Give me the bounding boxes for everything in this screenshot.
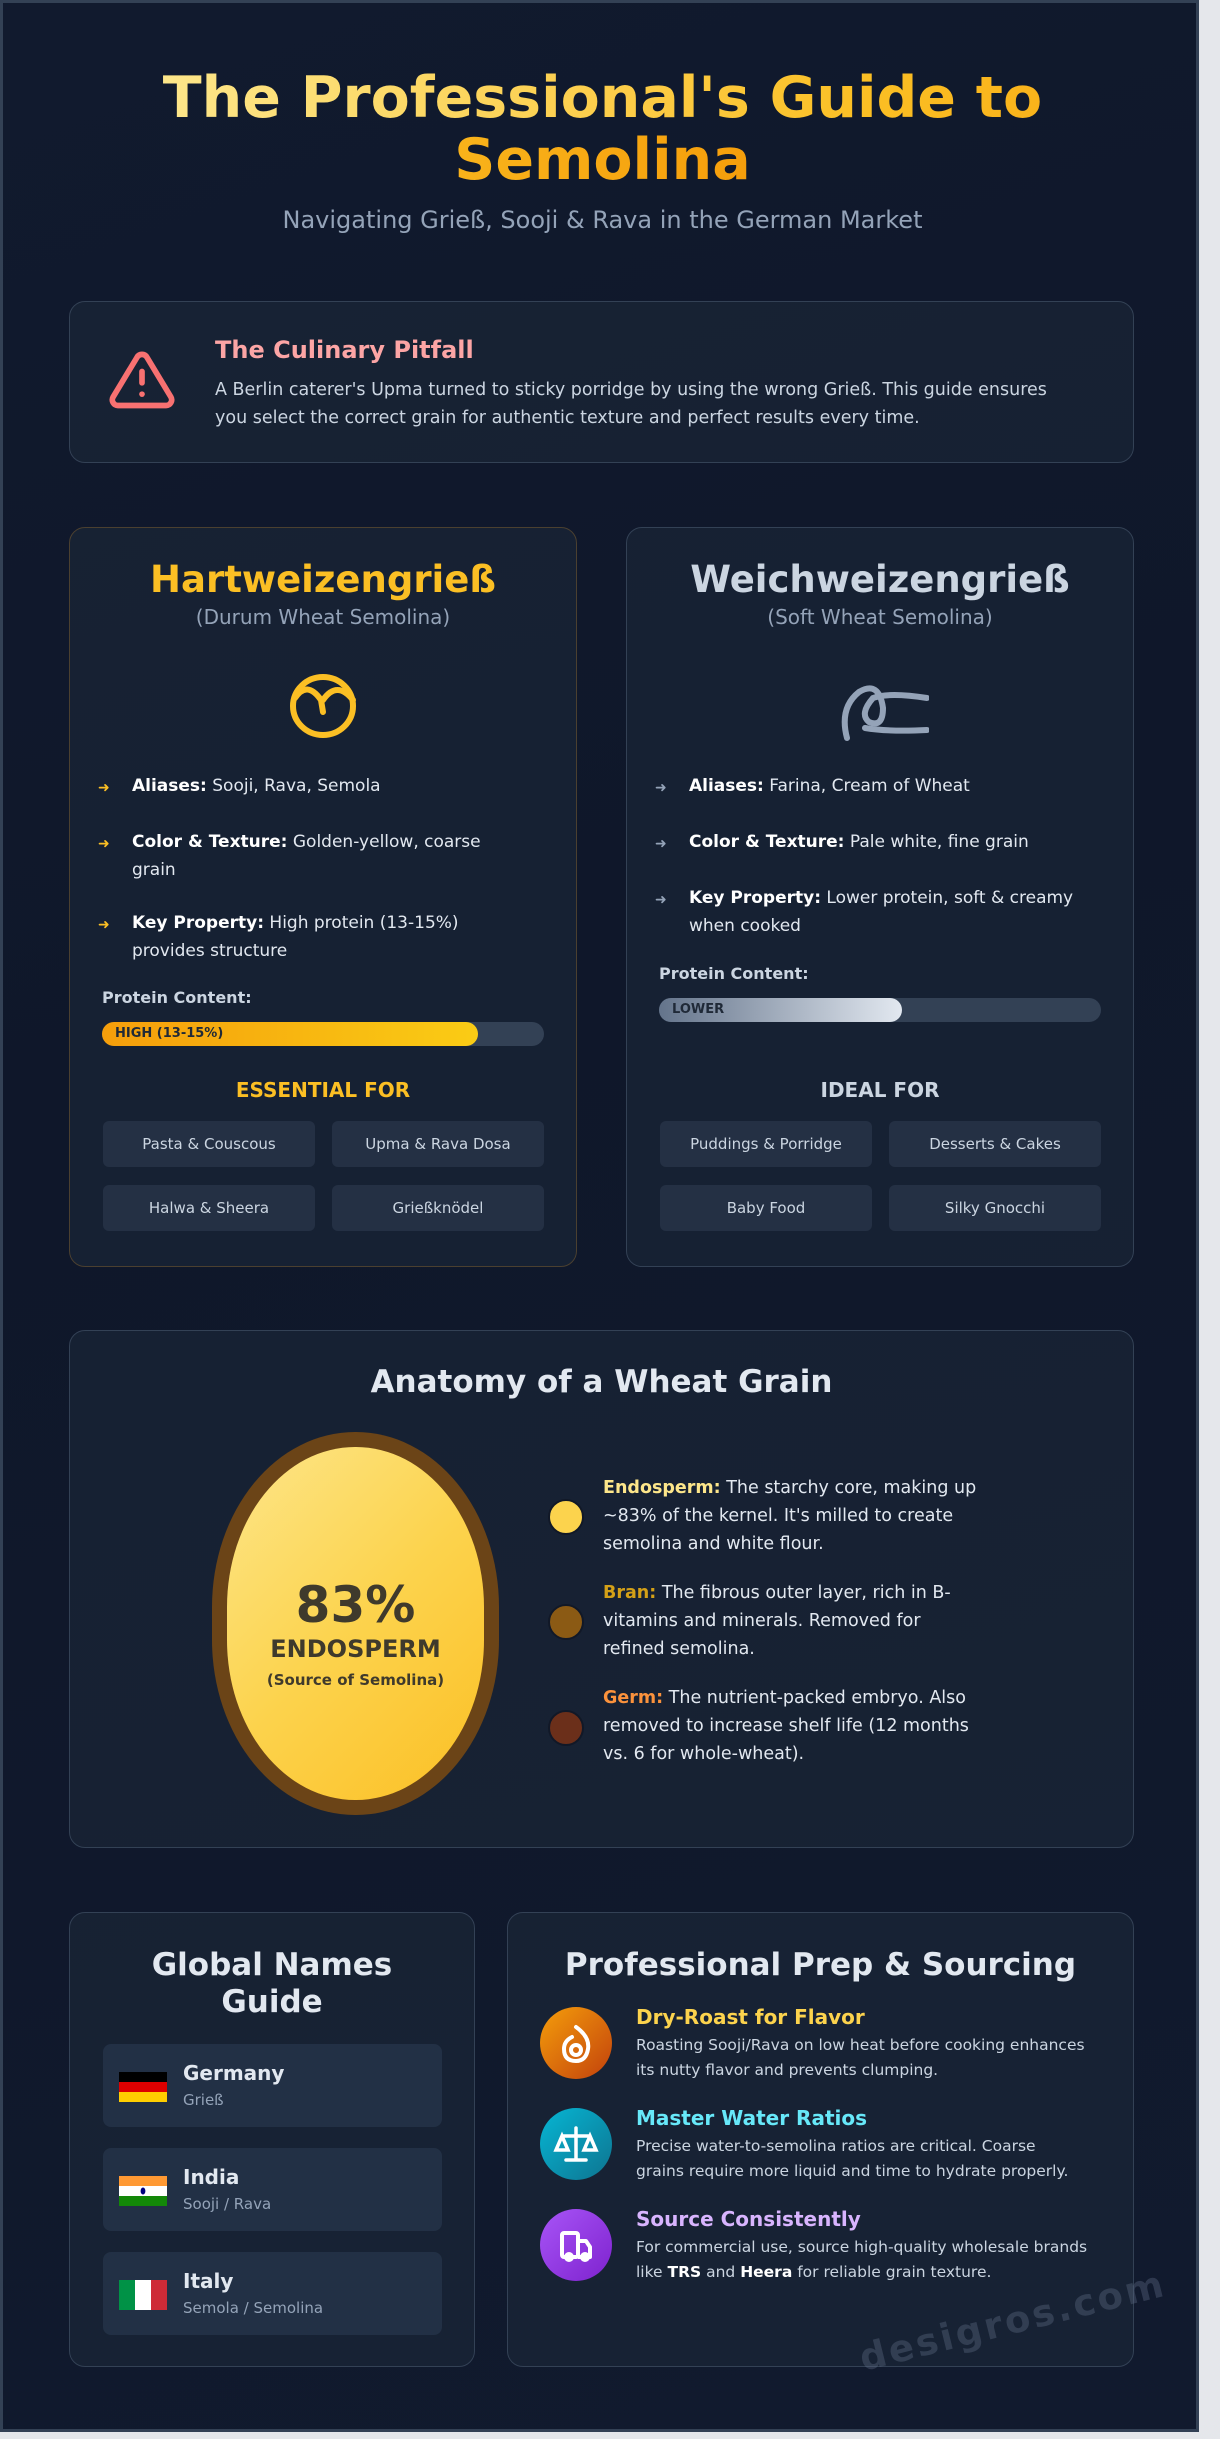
icon: swirl [842, 685, 929, 741]
panel: Hartweizengrieß: Grießknödel [393, 1199, 483, 1217]
essential for heading: ESSENTIAL FOR [236, 1078, 410, 1102]
country: india [103, 2148, 442, 2231]
panel: Weichweizengrieß: Baby Food [727, 1199, 805, 1217]
legend: bran [548, 1604, 584, 1640]
panel: Hartweizengrieß: ➜ [98, 917, 110, 933]
panel: Weichweizengrieß: Silky Gnocchi [945, 1199, 1045, 1217]
pitfall text: A Berlin caterer's Upma turned to sticky porridge by using the wrong Grieß. This guide ensures you select the correct grain for authentic texture and perfect results every time. [215, 380, 1047, 428]
panel: anatomy: Germ: The nutrient-packed embryo. Also removed to increase shelf life (12 months vs. 6 for whole-wheat). [603, 1688, 969, 1764]
subheading: (Soft Wheat Semolina) [767, 605, 993, 629]
pitfall heading: The Culinary Pitfall [215, 336, 474, 364]
tip: source consistently: Source Consistently [636, 2207, 861, 2231]
panel: Weichweizengrieß: Desserts & Cakes [929, 1135, 1061, 1153]
legend: germ [548, 1710, 584, 1746]
panel: Weichweizengrieß: Key Property: Lower protein, soft & creamy when cooked [689, 888, 1073, 936]
chips [660, 1121, 872, 1167]
tip: water ratios: Master Water Ratios [636, 2106, 867, 2130]
panel: anatomy [69, 1330, 1134, 1848]
protein bar [659, 964, 1101, 1022]
subheading: (Durum Wheat Semolina) [196, 605, 450, 629]
global heading [152, 1947, 392, 2020]
global heading: Guide [221, 1984, 323, 2020]
panel: Weichweizengrieß [626, 527, 1134, 1267]
chips [103, 1121, 315, 1167]
chips: Puddings & Porridge [690, 1135, 842, 1153]
country: italy [103, 2252, 442, 2335]
heading: Hartweizengrieß [150, 558, 496, 601]
tip: water ratios: Precise water-to-semolina ratios are critical. Coarse grains require more liquid and time to hydrate properly. [636, 2137, 1068, 2180]
anatomy heading: Anatomy of a Wheat Grain [371, 1364, 832, 1400]
panel: anatomy: Endosperm: The starchy core, making up ~83% of the kernel. It's milled to create semolina and white flour. [603, 1478, 976, 1554]
tip: dry roast: Roasting Sooji/Rava on low heat before cooking enhances its nutty flavor and prevents clumping. [636, 2036, 1085, 2079]
grain oval: (Source of Semolina) [267, 1671, 444, 1689]
tip: dry roast [540, 2005, 1085, 2079]
panel: Hartweizengrieß: Key Property: High protein (13-15%) provides structure [132, 913, 459, 961]
panel: Weichweizengrieß: ➜ [655, 836, 667, 852]
tip: water ratios [540, 2106, 1068, 2180]
panel: Hartweizengrieß: Halwa & Sheera [149, 1199, 269, 1217]
tip: source consistently [540, 2207, 1087, 2281]
grain oval: ENDOSPERM [270, 1635, 441, 1663]
country: italy: Semola / Semolina [183, 2299, 323, 2317]
grain oval: 83% [296, 1576, 415, 1634]
icon: grain [290, 674, 356, 738]
protein bar [102, 988, 544, 1046]
title [163, 65, 1042, 193]
panel: Hartweizengrieß: Upma & Rava Dosa [365, 1135, 511, 1153]
country: italy: Italy [183, 2269, 233, 2293]
panel: Hartweizengrieß: Color & Texture: Golden-yellow, coarse grain [132, 832, 481, 880]
country: germany [103, 2044, 442, 2127]
protein bar: Protein Content: [659, 964, 809, 983]
ideal for heading: IDEAL FOR [821, 1078, 939, 1102]
bullets: Aliases: Farina, Cream of Wheat [689, 776, 970, 796]
protein bar: LOWER [672, 1002, 724, 1017]
panel: Weichweizengrieß: Color & Texture: Pale white, fine grain [689, 832, 1029, 852]
country: germany: Germany [183, 2061, 284, 2085]
watermark: desigros.com [855, 2262, 1170, 2380]
protein bar: Protein Content: [102, 988, 252, 1007]
protein bar: HIGH (13-15%) [115, 1026, 223, 1041]
panel: anatomy: Bran: The fibrous outer layer, rich in B-vitamins and minerals. Removed for refined semolina. [603, 1583, 951, 1659]
grain oval [212, 1432, 499, 1815]
tip: dry roast: Dry-Roast for Flavor [636, 2005, 865, 2029]
bullets: ➜ [655, 780, 667, 796]
bullets: ➜ [98, 780, 110, 796]
tip: source consistently: For commercial use, source high-quality wholesale brands like TRS and Heera for reliable grain texture. [636, 2238, 1087, 2281]
chips: Pasta & Couscous [142, 1135, 276, 1153]
legend: endosperm [548, 1499, 584, 1535]
subtitle: Navigating Grieß, Sooji & Rava in the German Market [283, 206, 922, 234]
panel: Hartweizengrieß: ➜ [98, 836, 110, 852]
prep heading: Professional Prep & Sourcing [565, 1947, 1076, 1983]
country: germany: Grieß [183, 2091, 224, 2109]
global heading: Global Names [152, 1947, 392, 1983]
title: The Professional's Guide to [163, 65, 1042, 131]
icon: warning [109, 352, 175, 408]
panel: prep & sourcing [507, 1912, 1134, 2367]
panel: Hartweizengrieß [69, 527, 577, 1267]
country: india: Sooji / Rava [183, 2195, 271, 2213]
panel: culinary pitfall [69, 301, 1134, 463]
heading: Weichweizengrieß [690, 558, 1070, 601]
bullets: Aliases: Sooji, Rava, Semola [132, 776, 381, 796]
panel: Weichweizengrieß: ➜ [655, 892, 667, 908]
title: Semolina [454, 127, 751, 193]
country: india: India [183, 2165, 239, 2189]
panel: global names [69, 1912, 475, 2367]
